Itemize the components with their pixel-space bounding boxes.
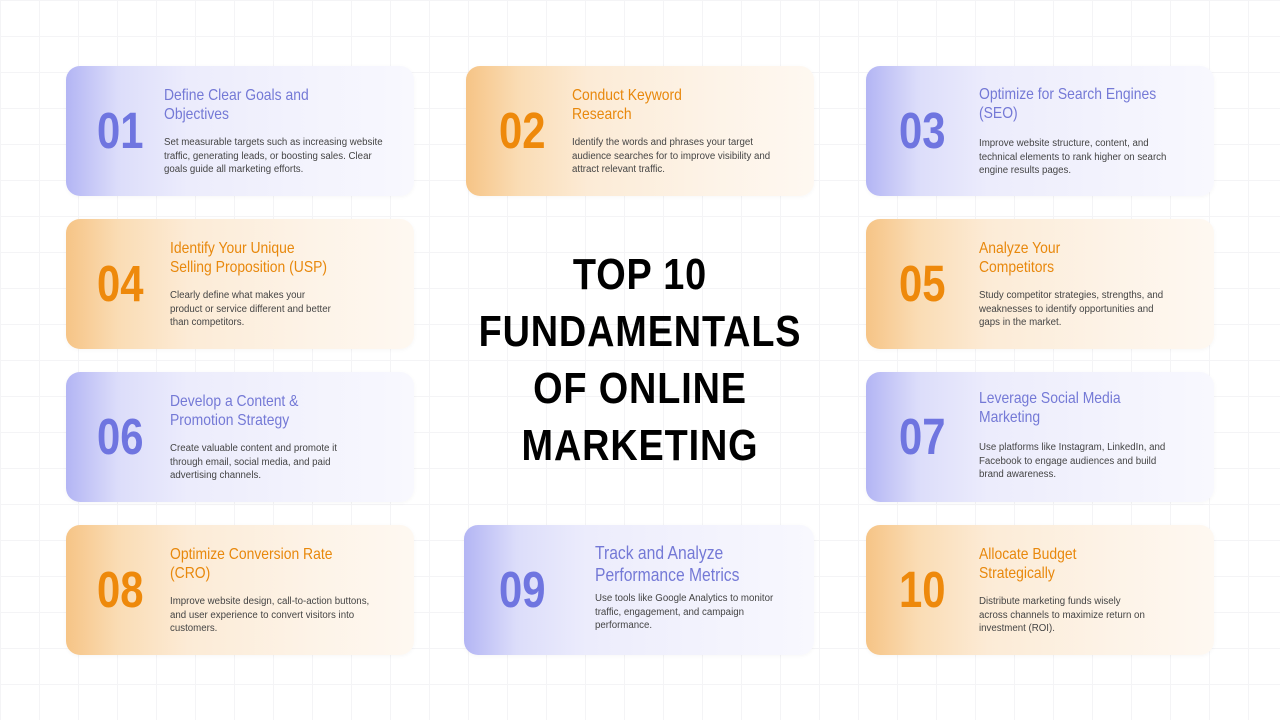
card 07 [866,372,1214,502]
card 03 [866,66,1214,196]
card 04: than competitors. [170,317,244,328]
card 08: Improve website design, call-to-action buttons, [170,596,369,607]
card 09: traffic, engagement, and campaign [595,606,744,618]
card 02: Identify the words and phrases your target [572,137,753,148]
card 01: Objectives [164,106,229,123]
card 01 [66,66,414,196]
card 06: 06 [97,408,144,465]
card 05: Competitors [979,259,1054,276]
card 05: Analyze Your [979,240,1060,257]
card 05: Study competitor strategies, strengths, and [979,290,1163,301]
card 04 [66,219,414,349]
card 03: 03 [899,102,946,159]
card 03: Improve website structure, content, and [979,138,1149,149]
card 07: 07 [899,408,946,465]
card 08: 08 [97,561,144,618]
card 07: Leverage Social Media [979,390,1121,407]
card 01: goals guide all marketing efforts. [164,164,303,175]
card 04: Clearly define what makes your [170,290,305,301]
card 09: 09 [499,561,546,618]
card 01: 01 [97,102,144,159]
card 06: Develop a Content & [170,393,298,410]
card 08: customers. [170,623,217,634]
card 09: performance. [595,620,652,631]
card 09: Performance Metrics [595,565,739,585]
card 10: Distribute marketing funds wisely [979,596,1121,607]
card 06 [66,372,414,502]
card 09 [464,525,814,655]
card 01: traffic, generating leads, or boosting sales. Clear [164,150,372,162]
card 10: Strategically [979,565,1055,582]
title: OF ONLINE [533,364,747,413]
card 04: Selling Proposition (USP) [170,259,327,276]
card 05 [866,219,1214,349]
card 03: Optimize for Search Engines [979,86,1156,103]
card 05: gaps in the market. [979,317,1061,328]
card 03: (SEO) [979,105,1018,122]
card 04: Identify Your Unique [170,240,295,257]
title: FUNDAMENTALS [479,307,801,356]
card 07: brand awareness. [979,469,1056,480]
card 03: engine results pages. [979,165,1071,176]
card 10: Allocate Budget [979,546,1077,563]
card 10: 10 [899,561,946,618]
card 10: investment (ROI). [979,623,1055,634]
card 10: across channels to maximize return on [979,610,1145,620]
card 02: 02 [499,102,546,159]
card 07: Use platforms like Instagram, LinkedIn, and [979,442,1165,453]
card 06: Create valuable content and promote it [170,443,337,454]
card 03: technical elements to rank higher on search [979,152,1166,162]
card 02: Research [572,106,632,123]
card 04: product or service different and better [170,304,331,314]
card 06: advertising channels. [170,470,261,481]
card 02 [466,66,814,196]
card 06: Promotion Strategy [170,412,289,429]
card 08: (CRO) [170,565,210,582]
card 10 [866,525,1214,655]
card 01: Define Clear Goals and [164,87,309,104]
card 02: audience searches for to improve visibility and [572,150,770,162]
card 09: Use tools like Google Analytics to monitor [595,593,773,604]
card 01: Set measurable targets such as increasing website [164,137,383,148]
title: TOP 10 [573,250,707,299]
title [479,250,801,470]
card 02: attract relevant traffic. [572,164,665,175]
card 05: 05 [899,255,946,312]
title: MARKETING [522,421,758,470]
card 09: Track and Analyze [595,543,723,563]
card 02: Conduct Keyword [572,87,682,104]
card 08 [66,525,414,655]
card 05: weaknesses to identify opportunities and [979,304,1153,314]
card 04: 04 [97,255,144,312]
card 08: Optimize Conversion Rate [170,546,332,563]
card 07: Marketing [979,409,1040,426]
card 06: through email, social media, and paid [170,456,330,468]
card 08: and user experience to convert visitors into [170,610,354,620]
card 07: Facebook to engage audiences and build [979,456,1156,466]
